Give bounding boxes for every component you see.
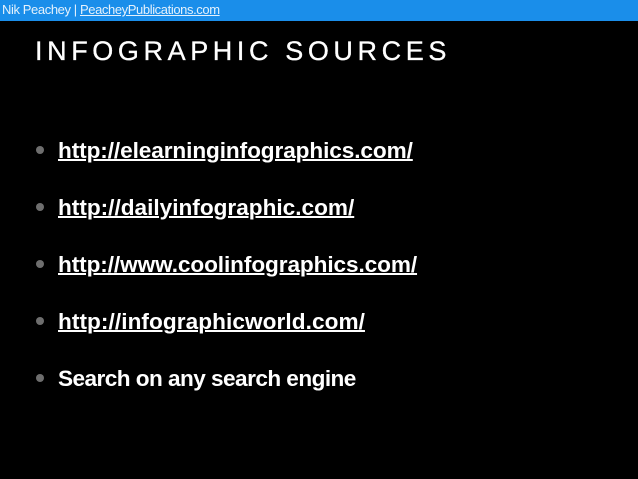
top banner	[0, 0, 638, 21]
list item: search: Search on any search engine	[58, 366, 356, 391]
list item: elearninginfographics: http://elearninginfographics.com/	[58, 138, 413, 163]
list item: coolinfographics: http://www.coolinfographics.com/	[58, 252, 417, 277]
bullet list	[36, 138, 418, 391]
title: INFOGRAPHIC SOURCES	[35, 36, 451, 66]
list item: infographicworld: http://infographicworld.com/	[58, 309, 365, 334]
banner credit text: Nik Peachey | PeacheyPublications.com	[2, 2, 220, 17]
list item: dailyinfographic: http://dailyinfographic.com/	[58, 195, 354, 220]
